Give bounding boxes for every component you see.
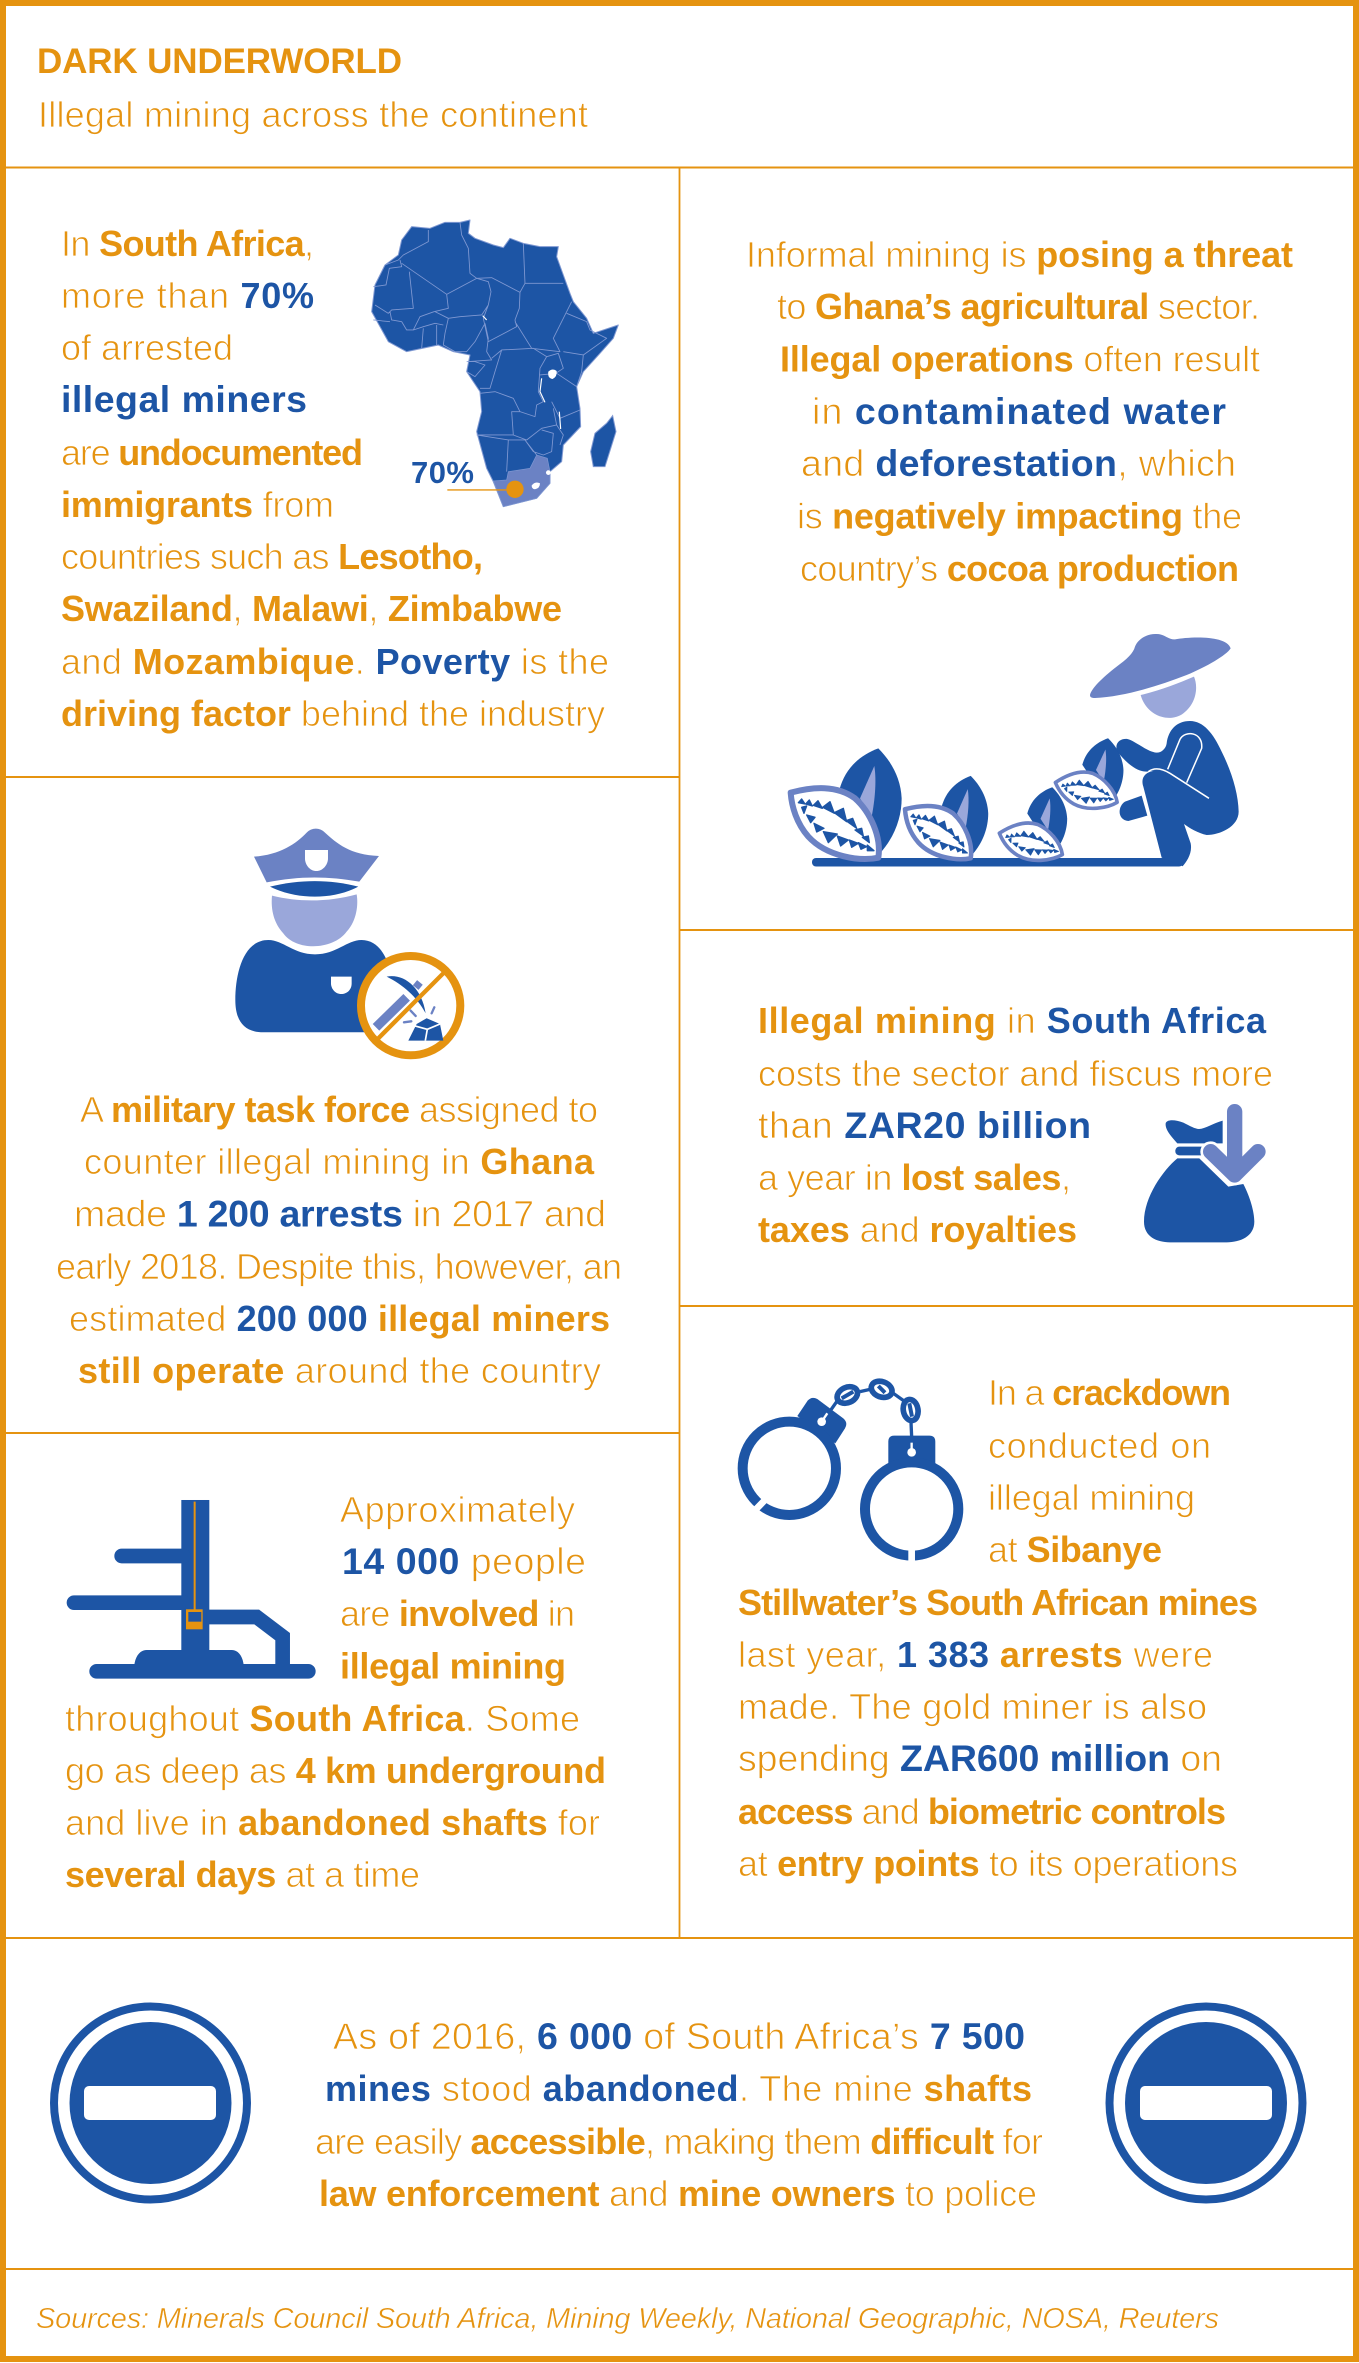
- text block: South Africa: [61, 223, 609, 734]
- text block: Ghana agriculture: and deforestation, which: [801, 442, 1236, 484]
- text block: Ghana task force: [56, 1089, 622, 1391]
- panel: lost revenue: [758, 1000, 1273, 1250]
- text block: South Africa: and Mozambique. Poverty is the: [61, 641, 609, 682]
- icon: mine shaft: [74, 1500, 308, 1671]
- icon: no entry sign left: [54, 2006, 247, 2200]
- text block: Sibanye crackdown: last year, 1 383 arrests were: [738, 1634, 1213, 1675]
- text block: Ghana task force: still operate around the country: [78, 1350, 601, 1391]
- text block: lost revenue: a year in lost sales,: [758, 1157, 1071, 1198]
- text block: Sibanye crackdown: In a crackdown: [988, 1372, 1231, 1413]
- text block: abandoned mines: are easily accessible, making them difficult for: [315, 2121, 1043, 2162]
- text block: lost revenue: costs the sector and fiscus more: [758, 1053, 1273, 1094]
- text block: Sibanye crackdown: conducted on: [988, 1425, 1211, 1466]
- text block: 14 000 miners: several days at a time: [65, 1854, 420, 1895]
- text block: 14 000 miners: throughout South Africa. Some: [65, 1698, 580, 1739]
- text block: Ghana agriculture: [746, 234, 1293, 589]
- text block: Ghana agriculture: in contaminated water: [812, 390, 1226, 432]
- icon: handcuffs: [743, 1378, 958, 1563]
- text block: Ghana agriculture: Informal mining is posing a threat: [746, 234, 1293, 275]
- text block: lost revenue: than ZAR20 billion: [758, 1104, 1091, 1146]
- text block: South Africa: illegal miners: [61, 378, 307, 420]
- text block: 14 000 miners: go as deep as 4 km underground: [65, 1750, 606, 1791]
- text block: Ghana task force: early 2018. Despite this, however, an: [56, 1246, 622, 1287]
- text block: lost revenue: taxes and royalties: [758, 1209, 1077, 1250]
- text block: abandoned mines: mines stood abandoned. The mine shafts: [325, 2068, 1032, 2109]
- text block: Sibanye crackdown: at entry points to its operations: [738, 1843, 1238, 1884]
- panel: abandoned mines: [54, 2006, 1302, 2214]
- panel: Ghana agriculture threat: [746, 234, 1293, 872]
- text block: South Africa: In South Africa,: [61, 223, 314, 264]
- text block: Ghana task force: made 1 200 arrests in 2017 and: [74, 1192, 606, 1234]
- text block: South Africa: countries such as Lesotho,: [61, 536, 483, 577]
- text block: Ghana agriculture: Illegal operations often result: [780, 338, 1260, 380]
- text block: Sibanye crackdown: [738, 1372, 1258, 1884]
- icon: no entry sign right: [1110, 2006, 1302, 2200]
- text block: Ghana agriculture: is negatively impacting the: [797, 496, 1242, 536]
- subtitle: Illegal mining across the continent: [38, 94, 588, 135]
- text block: 14 000 miners: and live in abandoned shafts for: [65, 1802, 600, 1843]
- text block: lost revenue: Illegal mining in South Africa: [758, 1000, 1267, 1041]
- text block: Sibanye crackdown: spending ZAR600 million on: [738, 1737, 1222, 1779]
- text block: South Africa: driving factor behind the industry: [61, 693, 605, 734]
- text block: Sibanye crackdown: illegal mining: [988, 1477, 1195, 1518]
- text block: Ghana agriculture: country’s cocoa production: [800, 548, 1239, 589]
- text block: South Africa: of arrested: [61, 327, 233, 368]
- panel: South Africa 14 000 miners: [65, 1489, 606, 1895]
- text block: 14 000 miners: illegal mining: [340, 1646, 566, 1686]
- panel: Ghana military task force: [56, 829, 622, 1391]
- text block: Ghana agriculture: to Ghana’s agricultural sector.: [777, 286, 1260, 327]
- text block: Sibanye crackdown: made. The gold miner is also: [738, 1686, 1207, 1727]
- text block: South Africa: more than 70%: [61, 275, 314, 316]
- text block: Ghana task force: counter illegal mining in Ghana: [84, 1141, 595, 1182]
- icon: farmer with cocoa pods: [791, 634, 1239, 872]
- text block: South Africa: are undocumented: [61, 432, 363, 473]
- map: Africa with South Africa highlighted: [372, 220, 618, 507]
- icon: money bag with down arrow: [1144, 1112, 1258, 1242]
- text block: lost revenue: [758, 1000, 1273, 1250]
- text block: South Africa: immigrants from: [61, 484, 334, 525]
- header panel: [37, 42, 588, 135]
- text block: Sibanye crackdown: Stillwater’s South African mines: [738, 1582, 1258, 1623]
- text block: Sibanye crackdown: access and biometric controls: [738, 1791, 1226, 1832]
- title: DARK UNDERWORLD: [37, 42, 402, 81]
- text block: Ghana task force: estimated 200 000 illegal miners: [69, 1298, 610, 1339]
- text block: Sibanye crackdown: at Sibanye: [988, 1529, 1162, 1570]
- text block: 14 000 miners: Approximately: [340, 1489, 575, 1530]
- map label: 70%: 70%: [411, 455, 474, 490]
- text block: 14 000 miners: 14 000 people: [342, 1540, 586, 1582]
- text block: abandoned mines: As of 2016, 6 000 of South Africa’s 7 500: [333, 2015, 1025, 2057]
- text block: 14 000 miners: [65, 1489, 606, 1895]
- panel: Sibanye crackdown: [738, 1372, 1258, 1884]
- text block: abandoned mines: [315, 2015, 1043, 2214]
- panel: South Africa undocumented immigrants: [61, 220, 618, 734]
- text block: Ghana task force: A military task force assigned to: [80, 1089, 598, 1130]
- sources footer: Sources: Minerals Council South Africa, Mining Weekly, National Geographic, NOSA, Reuters: [36, 2303, 1219, 2335]
- text block: South Africa: Swaziland, Malawi, Zimbabwe: [61, 588, 562, 629]
- text block: 14 000 miners: are involved in: [340, 1593, 575, 1634]
- text block: abandoned mines: law enforcement and mine owners to police: [319, 2173, 1037, 2214]
- icon: police officer with crossed-out pickaxe: [235, 829, 460, 1055]
